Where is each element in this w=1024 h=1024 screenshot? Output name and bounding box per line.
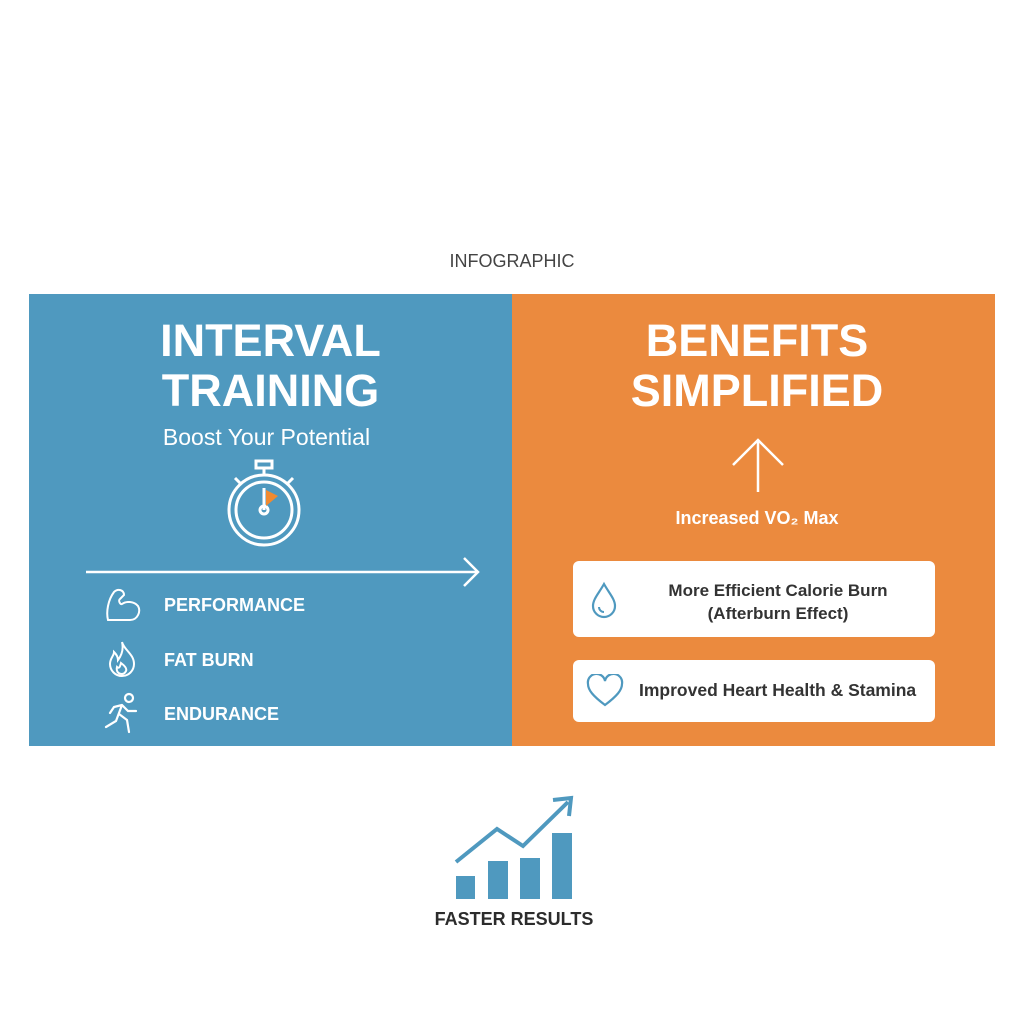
card: calorie burn: More Efficient Calorie Burn (668, 581, 888, 600)
panel: benefits (512, 294, 995, 746)
card: heart health (573, 660, 935, 722)
heading: SIMPLIFIED (631, 365, 883, 416)
label: faster results: FASTER RESULTS (435, 909, 593, 929)
icon: flame (109, 642, 135, 677)
heading: TRAINING (162, 365, 379, 416)
label: infographic: INFOGRAPHIC (449, 251, 574, 271)
icon: runner (104, 692, 137, 734)
item: endurance (104, 692, 279, 734)
subtitle: Boost Your Potential (163, 424, 370, 450)
heading (631, 315, 883, 416)
item: endurance: ENDURANCE (164, 704, 279, 724)
heading: INTERVAL (160, 315, 381, 366)
card: calorie burn (573, 561, 935, 637)
item: fat burn (109, 642, 254, 677)
text: VO2 max: Increased VO₂ Max (675, 508, 839, 528)
item: performance (106, 588, 305, 621)
item: fat burn: FAT BURN (164, 650, 254, 670)
icon: up arrow (732, 438, 784, 492)
arrow (86, 557, 480, 587)
heading (160, 315, 381, 416)
item: performance: PERFORMANCE (164, 595, 305, 615)
icon: heart (586, 674, 624, 706)
icon: stopwatch (228, 460, 300, 546)
card: heart health: Improved Heart Health & Stamina (639, 680, 916, 700)
card: calorie burn: (Afterburn Effect) (708, 604, 848, 623)
icon: drop (592, 582, 616, 618)
icon: muscle (106, 588, 140, 621)
panel: interval training (29, 294, 512, 746)
heading: BENEFITS (646, 315, 868, 366)
chart: faster results (454, 796, 574, 899)
